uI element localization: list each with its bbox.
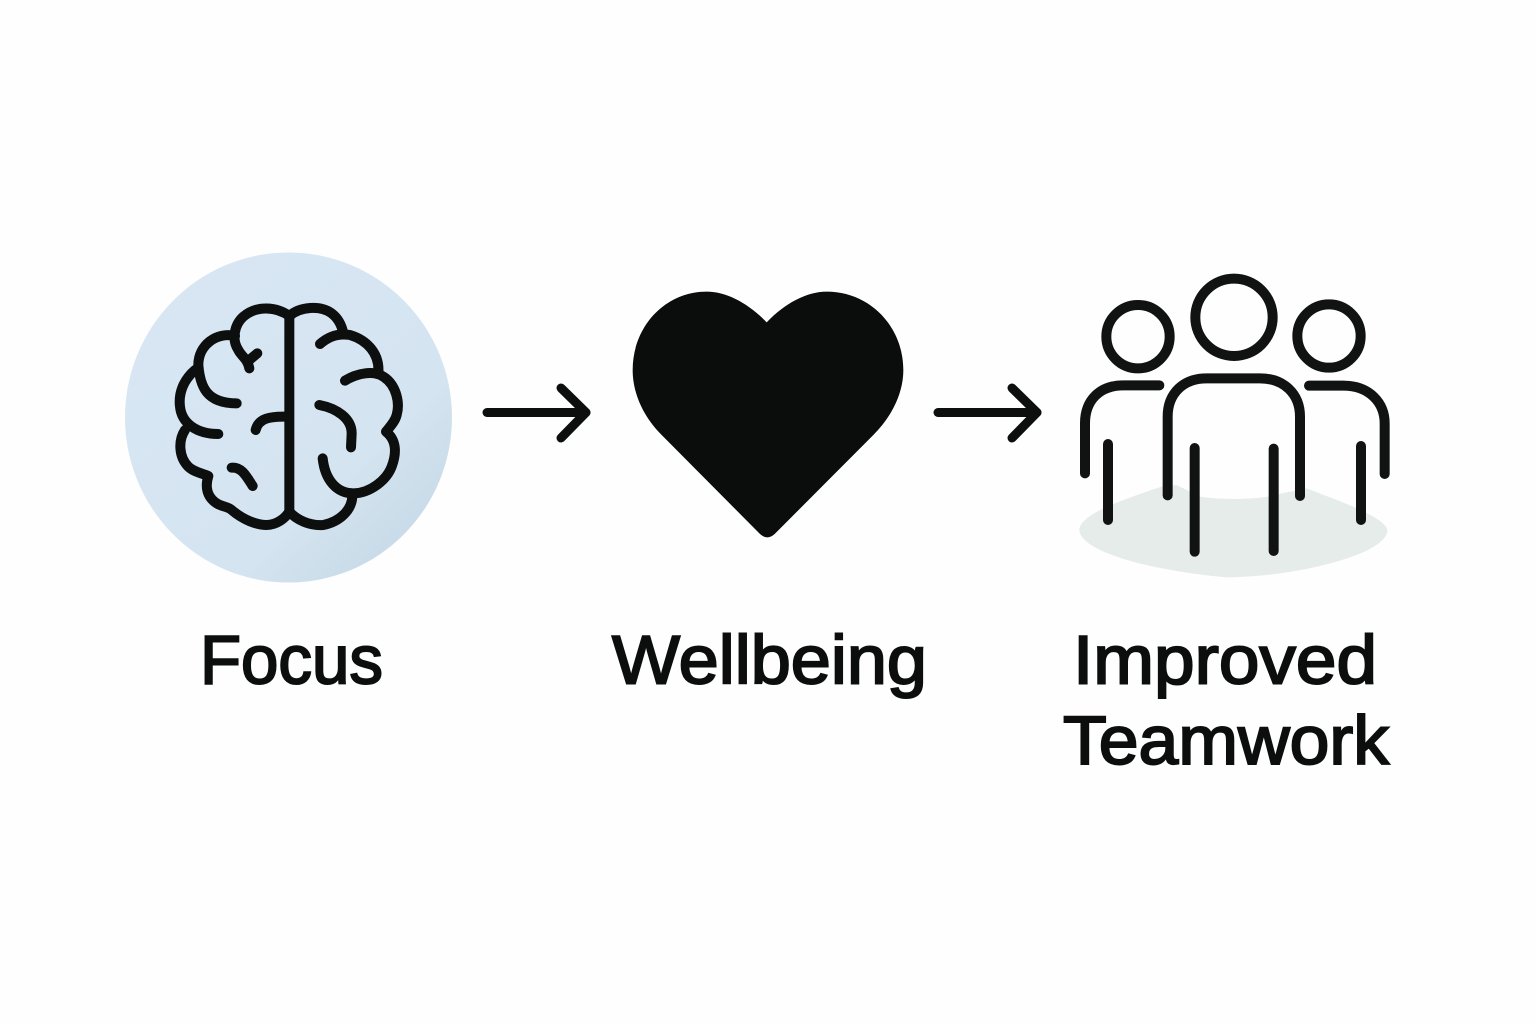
icon: light blue circle	[125, 252, 452, 582]
label: Improved Teamwork	[1063, 622, 1390, 779]
panel: wellbeing	[612, 292, 927, 698]
icon: ground shadow	[1079, 485, 1387, 577]
arrow: focus to wellbeing	[487, 388, 586, 438]
icon: three people outlines	[1085, 279, 1385, 552]
icon: brain	[180, 308, 398, 525]
panel: focus	[125, 252, 452, 698]
arrow: wellbeing to teamwork	[938, 388, 1037, 438]
label: Focus: Focus	[200, 622, 383, 698]
label: Improved Teamwork: Teamwork	[1063, 702, 1390, 779]
icon: people group	[1079, 279, 1387, 577]
label: Improved Teamwork: Improved	[1073, 622, 1377, 698]
panel: improved teamwork	[1063, 279, 1390, 779]
icon: heart	[633, 292, 903, 537]
label: Wellbeing: Wellbeing	[612, 622, 927, 698]
